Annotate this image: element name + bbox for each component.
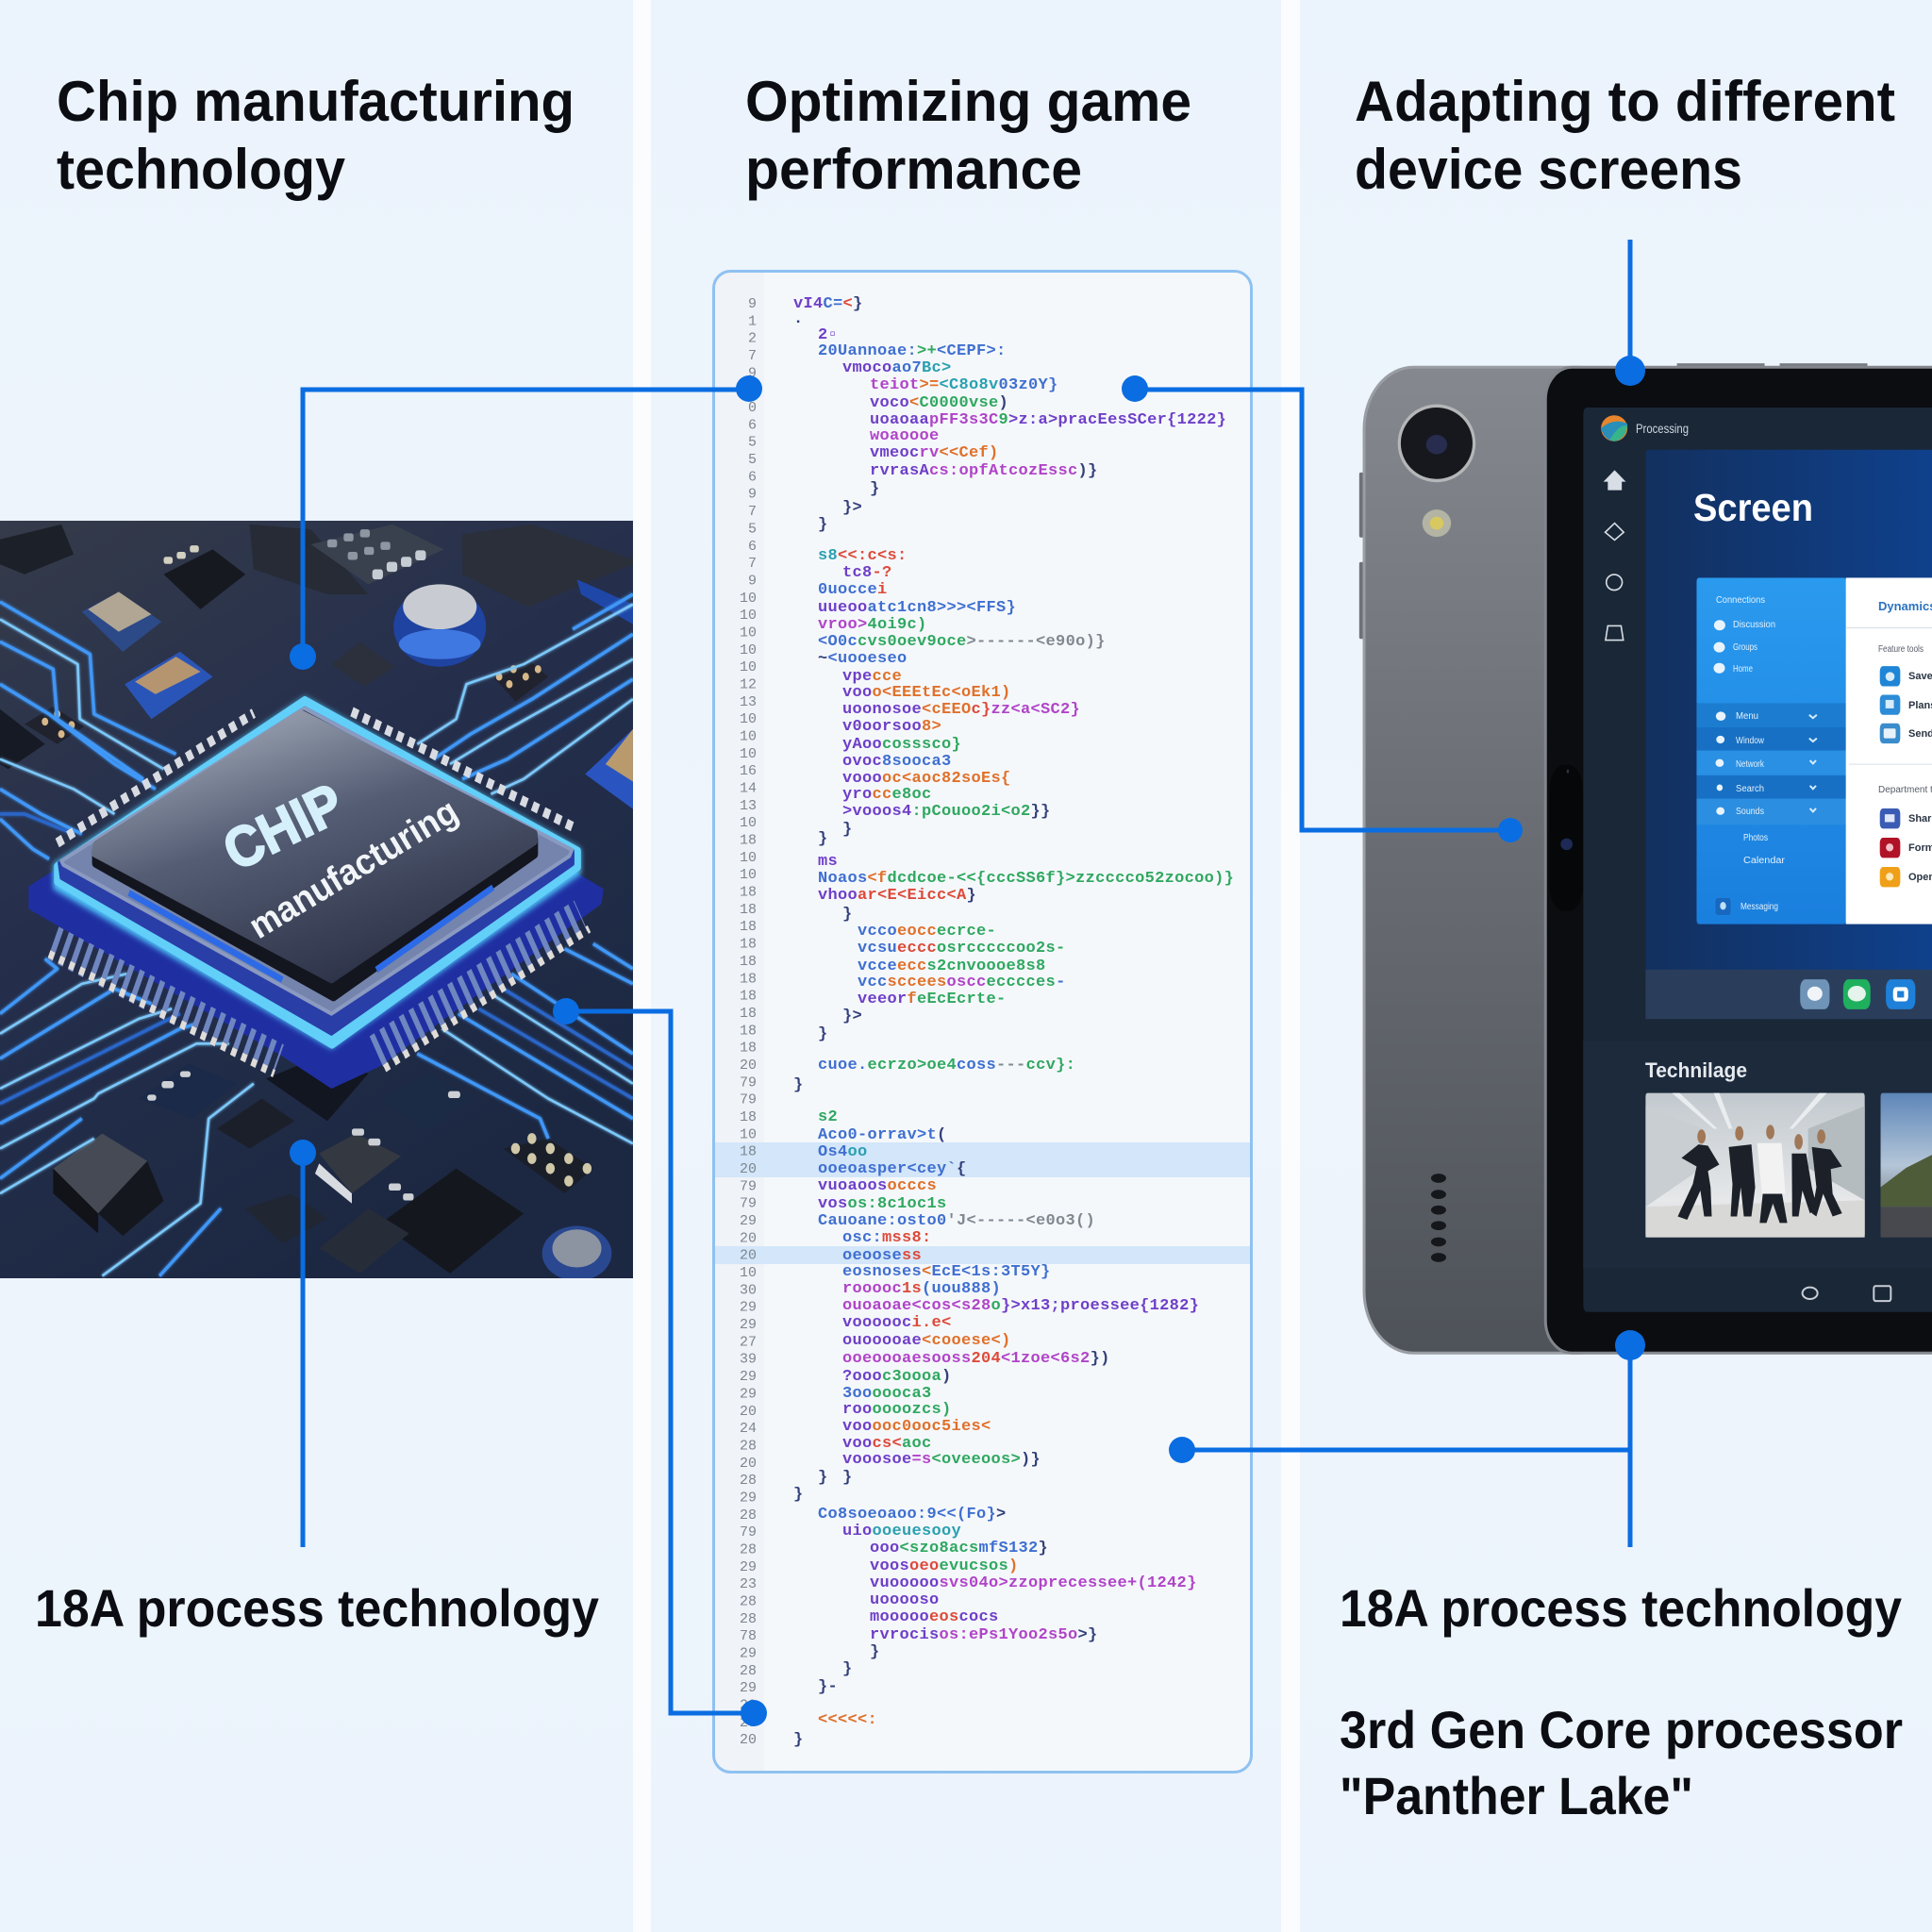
tablet screen text: Processing [1636, 421, 1689, 436]
code text: } [870, 480, 880, 498]
code text: vcceeccs2cnvoooe8s8 [858, 958, 1046, 975]
code text: vuooooosvs04o>zzoprecessee+(1242} [870, 1574, 1197, 1592]
code text: moooooeoscocs [870, 1608, 999, 1626]
code text: vroo>4oi9c) [818, 616, 927, 634]
tablet screen text: Messaging [1740, 902, 1778, 912]
tablet screen text: Photos [1743, 833, 1768, 843]
code text: } [818, 1025, 828, 1043]
code line numbers: 16 [740, 763, 757, 779]
screen [1583, 408, 1932, 1312]
code text: } [818, 516, 828, 534]
code line numbers: 29 [740, 1386, 757, 1402]
code text: uoonosoe<cEEOc}zz<a<SC2} [842, 701, 1080, 719]
code line numbers: 29 [740, 1680, 757, 1696]
code line numbers: 7 [748, 504, 757, 520]
tablet screen text: Network [1736, 759, 1765, 770]
code text: uooooso [870, 1591, 940, 1609]
code text: . [793, 310, 804, 328]
code line numbers: 10 [740, 867, 757, 883]
sidebar icons [1606, 471, 1624, 641]
side buttons [1358, 472, 1362, 640]
code line numbers: 0 [748, 400, 757, 416]
connector: code panel to chip image [290, 375, 762, 670]
code text: yrocce8oc [842, 786, 932, 804]
code text: vcsuecccosrcccccoo2s- [858, 940, 1066, 958]
heading: chip manufacturing technology: Chip manufacturing [57, 70, 575, 133]
code line numbers: 29 [740, 1369, 757, 1385]
heading: chip manufacturing technology: technology [57, 138, 346, 201]
code text: ooeoooaesooss204<1zoe<6s2}) [842, 1350, 1110, 1368]
code line numbers: 18 [740, 971, 757, 987]
code line numbers: 18 [740, 919, 757, 935]
code line numbers: 29 [740, 1317, 757, 1333]
tablet back shell [1362, 366, 1583, 1355]
code line numbers: 18 [740, 937, 757, 953]
code text: } [842, 1660, 853, 1678]
code text: s8<<:c<s: [818, 547, 908, 565]
code text: uoaoaapFF3s3C9>z:a>pracEesSCer{1222} [870, 411, 1226, 429]
code line numbers: 18 [740, 885, 757, 901]
code line numbers: 7 [748, 348, 757, 364]
tablet screen text: Home [1733, 664, 1753, 675]
code line numbers: 78 [740, 1628, 757, 1644]
heading: optimizing game performance: Optimizing game [745, 70, 1191, 133]
code line numbers: 10 [740, 642, 757, 658]
code line numbers: 7 [748, 556, 757, 572]
code text: vmocoao7Bc> [842, 359, 952, 377]
code line numbers: 28 [740, 1611, 757, 1627]
code text: ovoc8sooca3 [842, 753, 952, 771]
chip illustration [0, 521, 633, 1281]
label: 18A process technology (left): 18A process technology [35, 1578, 599, 1638]
connector: code panel to tablet [1122, 375, 1523, 842]
code text: woaoooe [870, 427, 940, 445]
connector: chip pins to code panel bottom [553, 998, 767, 1726]
code text: uioooeuesooy [842, 1523, 961, 1541]
code line numbers: 10 [740, 625, 757, 641]
code text: vuoaoosocccs [818, 1177, 937, 1195]
tablet screen text: Groups [1733, 642, 1757, 653]
code line numbers: 29 [740, 1698, 757, 1714]
code text: rooooc1s(uou888) [842, 1280, 1001, 1298]
chip pins [49, 711, 590, 1074]
code text: ooeoasper<cey`{ [818, 1160, 967, 1178]
label: 18A process technology (right): 18A process technology [1340, 1578, 1902, 1638]
code text: vooo<EEEtEc<oEk1) [842, 684, 1011, 702]
code line numbers: 5 [748, 521, 757, 537]
code line numbers: 10 [740, 815, 757, 831]
code text: } [793, 1731, 804, 1749]
code text: oeoosess [842, 1247, 922, 1265]
code text: }- [818, 1678, 838, 1696]
code line numbers: 10 [740, 746, 757, 762]
code line numbers: 18 [740, 954, 757, 970]
code line numbers: 28 [740, 1541, 757, 1557]
code editor panel [713, 272, 1251, 1772]
tablet screen text: Connections [1716, 595, 1765, 606]
code text: } [842, 821, 853, 839]
code line numbers: 13 [740, 694, 757, 710]
app logo [1601, 415, 1627, 441]
code line numbers: 6 [748, 417, 757, 433]
code line numbers: 79 [740, 1092, 757, 1108]
code text: Co8soeoaoo:9<<(Fo}> [818, 1506, 1007, 1524]
code line numbers: 28 [740, 1594, 757, 1609]
code line numbers: 20 [740, 1732, 757, 1748]
code text: 2▫ [818, 326, 838, 344]
code text: vI4C=<} [793, 295, 863, 313]
code text: osc:mss8: [842, 1229, 932, 1247]
code text: ouooooae<cooese<) [842, 1332, 1011, 1350]
code text: <<<<<: [818, 1711, 877, 1729]
photo: landscape [1881, 1093, 1932, 1238]
panel: game performance column [651, 0, 1281, 1932]
code line numbers: 2 [748, 331, 757, 347]
code text: roooooozcs) [842, 1401, 952, 1419]
code text: uueooatc1cn8>>><FFS} [818, 599, 1016, 617]
tablet screen text: Menu [1736, 711, 1758, 722]
code line numbers: 18 [740, 1144, 757, 1160]
code line numbers: 29 [740, 1559, 757, 1575]
code line numbers: 6 [748, 539, 757, 555]
code line numbers: 10 [740, 1265, 757, 1281]
label: 3rd Gen Core processor Panther Lake: 3rd Gen Core processor [1340, 1700, 1903, 1759]
code text: ?oooc3oooa) [842, 1368, 952, 1386]
code line numbers: 4 [748, 383, 757, 399]
tablet screen text [1636, 421, 1932, 1082]
code line numbers: 10 [740, 591, 757, 607]
tablet device [1359, 363, 1932, 1353]
code text: }> [842, 1008, 862, 1025]
code line numbers: 9 [748, 487, 757, 503]
code line numbers: 29 [740, 1213, 757, 1229]
code line numbers: 18 [740, 1041, 757, 1057]
connector: chip image down to 18A label [290, 1140, 316, 1547]
code line numbers: 18 [740, 989, 757, 1005]
code text: tc8-? [842, 564, 892, 582]
tablet screen text: Feature tools [1878, 644, 1924, 655]
code line numbers: 79 [740, 1196, 757, 1212]
front camera notch [1560, 770, 1573, 851]
code text: rvrocisos:ePs1Yoo2s5o>} [870, 1626, 1098, 1644]
code text: veeorfeEcEcrte- [858, 991, 1007, 1008]
code line numbers: 20 [740, 1248, 757, 1264]
code line numbers: 39 [740, 1352, 757, 1368]
rear camera [1398, 405, 1475, 537]
code text: } [818, 830, 828, 848]
code text: vpecce [842, 668, 902, 686]
code line numbers: 24 [740, 1421, 757, 1437]
code text: vmeocrv<<Cef) [870, 444, 999, 462]
code line numbers: 5 [748, 452, 757, 468]
code line numbers: 9 [748, 296, 757, 312]
chip base [28, 870, 604, 1089]
code text: vooooc0ooc5ies< [842, 1418, 991, 1436]
chip package [53, 696, 581, 1049]
code text: vooooc<aoc82soEs{ [842, 770, 1011, 788]
code line numbers: 29 [740, 1646, 757, 1662]
code text: voosoeoevucsos) [870, 1557, 1019, 1575]
code text: >vooos4:pCouoo2i<o2}} [842, 803, 1051, 821]
code text: } [870, 1643, 880, 1661]
code text: 20Uannoae:>+<CEPF>: [818, 342, 1007, 360]
code text: Cauoane:osto0'J<-----<e0o3() [818, 1212, 1095, 1230]
code line numbers: 10 [740, 850, 757, 866]
code line numbers: 10 [740, 1126, 757, 1142]
code line numbers: 18 [740, 1006, 757, 1022]
code text: yAoocosssco} [842, 736, 961, 754]
code line numbers: 79 [740, 1178, 757, 1194]
heading: adapting to different device screens: Adapting to different [1355, 70, 1895, 133]
code text: 0uoccei [818, 581, 888, 599]
code line numbers: 13 [740, 798, 757, 814]
tablet screen text: Save [1908, 671, 1932, 682]
tablet screen text: Discussion [1733, 620, 1775, 630]
code line numbers: 20 [740, 1058, 757, 1074]
code line numbers: 10 [740, 659, 757, 675]
top buttons [1677, 363, 1868, 366]
code line numbers: 18 [740, 1023, 757, 1039]
tablet screen text: Technilage [1645, 1058, 1747, 1082]
code text: <O0ccvs0oev9oce>------<e90o)} [818, 633, 1106, 651]
code text: }> [842, 499, 862, 517]
code text: Os4oo [818, 1143, 868, 1161]
code line numbers: 79 [740, 1074, 757, 1091]
code text: ~<uooeseo [818, 650, 908, 668]
code text [793, 295, 1234, 1749]
code text: s2 [818, 1108, 838, 1126]
code text: ooo<szo8acsmfS132} [870, 1540, 1048, 1557]
circuit traces [0, 594, 633, 1275]
code text: voocs<aoc [842, 1435, 932, 1453]
heading: optimizing game performance: performance [745, 138, 1082, 201]
code line numbers: 79 [740, 1524, 757, 1541]
code line numbers: 18 [740, 902, 757, 918]
code text: vhooar<E<Eicc<A} [818, 887, 976, 905]
heading: adapting to different device screens [1355, 70, 1895, 201]
code line numbers: 10 [740, 711, 757, 727]
chip label: manufacturing [242, 791, 465, 947]
code line numbers: 20 [740, 1161, 757, 1177]
code line numbers: 5 [748, 435, 757, 451]
highlighted code lines [715, 1142, 1251, 1264]
code line numbers: 14 [740, 781, 757, 797]
tablet screen text: Search [1736, 784, 1764, 794]
code text: ouoaoae<cos<s28o}>x13;proessee{1282} [842, 1297, 1199, 1315]
board components [0, 525, 633, 1281]
nav buttons [1803, 1286, 1890, 1301]
code line numbers: 28 [740, 1473, 757, 1489]
code text: voooooci.e< [842, 1314, 952, 1332]
tablet screen text: Sounds [1736, 807, 1764, 817]
code line numbers: 28 [740, 1438, 757, 1454]
heading: adapting to different device screens: device screens [1355, 138, 1742, 201]
code line numbers: 12 [740, 676, 757, 692]
code line numbers: 28 [740, 1663, 757, 1679]
white detail panel [1846, 577, 1932, 924]
code line numbers: 10 [740, 608, 757, 624]
hero card [1645, 450, 1932, 1019]
dock icons [1800, 979, 1915, 1009]
panel: device screens column [1300, 0, 1932, 1932]
code line numbers: 29 [740, 1300, 757, 1316]
code line numbers: 10 [740, 728, 757, 744]
code line numbers: 6 [748, 469, 757, 485]
people [1677, 1124, 1842, 1223]
code text: } [842, 906, 853, 924]
code text: } [793, 1076, 804, 1094]
code line numbers: 28 [740, 1507, 757, 1524]
code line numbers: 27 [740, 1334, 757, 1350]
code text: voco<C0000vse) [870, 394, 1008, 412]
code text: ms [818, 853, 838, 871]
chip label: CHIP [213, 772, 353, 883]
code text: eosnoses<EcE<1s:3T5Y} [842, 1263, 1051, 1281]
blue settings panel [1696, 577, 1846, 924]
code text: 3oooooca3 [842, 1385, 932, 1403]
code text: } [793, 1486, 804, 1504]
code text: Noaos<fdcdcoe-<<{cccSS6f}>zzcccco52zocoo)} [818, 870, 1234, 888]
heading: chip manufacturing technology [57, 70, 575, 201]
code line numbers: 29 [740, 1490, 757, 1506]
label: 3rd Gen Core processor Panther Lake: "Panther Lake" [1340, 1766, 1693, 1825]
code line numbers: 1 [748, 313, 757, 329]
code text: } [842, 1469, 853, 1487]
code text: rvrasAcs:opfAtcozEssc)} [870, 462, 1098, 480]
code text: vosos:8c1oc1s [818, 1195, 947, 1213]
tablet front bezel [1545, 367, 1932, 1353]
connector: tablet bottom to labels and code panel [1169, 1330, 1645, 1547]
code line numbers: 9 [748, 365, 757, 381]
label: 3rd Gen Core processor Panther Lake [1340, 1700, 1903, 1825]
code text: v0oorsoo8> [842, 718, 941, 736]
tablet screen text: Calendar [1743, 856, 1786, 866]
heading: optimizing game performance [745, 70, 1191, 201]
code line numbers: 9 [748, 573, 757, 589]
tablet screen text: Window [1736, 736, 1765, 746]
code text: vooosoe=s<oveeoos>)} [842, 1451, 1041, 1469]
code text: cuoe.ecrzo>oe4coss---ccv}: [818, 1057, 1075, 1074]
photo: team in a factory [1645, 1093, 1865, 1238]
tablet screen text: Screen [1693, 486, 1813, 529]
code line numbers: 18 [740, 1109, 757, 1125]
code text: teiot>=<C8o8v03z0Y} [870, 376, 1058, 394]
code line numbers: 23 [740, 1576, 757, 1592]
speaker holes [1431, 1174, 1446, 1262]
code text: Aco0-orrav>t( [818, 1126, 947, 1144]
code line numbers: 30 [740, 1282, 757, 1298]
code text: } [818, 1469, 828, 1487]
code line numbers: 20 [740, 1404, 757, 1420]
panel: chip manufacturing column [0, 0, 633, 1932]
code text: vccscceesosccecccces- [858, 974, 1066, 991]
code line numbers: 20 [740, 1456, 757, 1472]
connector: heading to tablet top [1615, 240, 1645, 386]
code line numbers: 18 [740, 833, 757, 849]
code line numbers: 28 [740, 1715, 757, 1731]
code text: vccoeoccecrce- [858, 923, 996, 941]
code line numbers: 20 [740, 1230, 757, 1246]
